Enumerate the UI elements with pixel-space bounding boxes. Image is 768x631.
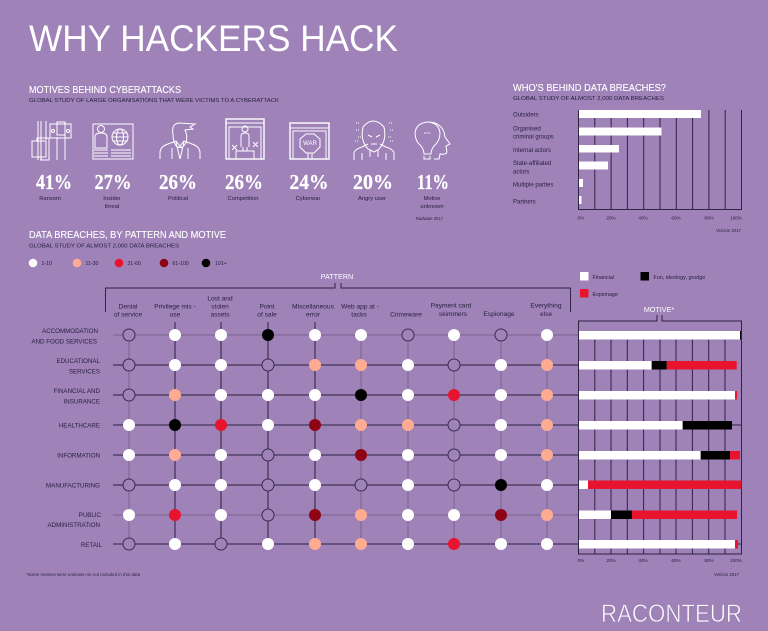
stacked bars: motive xyxy=(579,331,742,548)
column headers: Point xyxy=(259,304,275,310)
matrix: row retail xyxy=(123,538,553,550)
row labels: RETAIL xyxy=(81,542,103,549)
icon: ransom xyxy=(32,121,71,160)
stat: insider threat: Insider xyxy=(103,196,121,202)
column headers: Everything xyxy=(530,302,562,310)
row labels: Outsiders xyxy=(513,112,539,118)
axis labels: 100% xyxy=(730,216,742,220)
subheading: who's behind: GLOBAL STUDY OF ALMOST 2,000 DATA BREACHES xyxy=(513,96,664,102)
heading: who's behind: WHO'S BEHIND DATA BREACHES? xyxy=(513,83,666,94)
row labels: actors xyxy=(513,170,529,176)
row labels: criminal groups xyxy=(513,134,554,140)
column headers xyxy=(114,296,562,318)
legend: motive colours: Espionage xyxy=(592,292,618,298)
column headers: else xyxy=(540,311,552,318)
bar chart: who's behind xyxy=(579,110,701,204)
column headers: Denial xyxy=(119,304,138,310)
legend: motive colours: Financial xyxy=(592,275,614,281)
gridlines xyxy=(578,110,742,210)
source: verizon: Verizon 2017 xyxy=(716,228,742,233)
row labels: HEALTHCARE xyxy=(59,422,100,430)
panel: data breaches by pattern and motive xyxy=(26,230,742,577)
title: WHY HACKERS HACK xyxy=(29,17,398,59)
axis labels: 0% xyxy=(578,216,584,220)
column headers: stolen xyxy=(211,304,229,310)
stat: insider threat: threat xyxy=(105,204,120,210)
stat: political: 26% xyxy=(159,170,197,194)
matrix: row financial xyxy=(123,389,553,401)
stat: insider threat xyxy=(94,170,132,210)
legend: dot sizes xyxy=(29,259,227,267)
motive axis labels xyxy=(578,558,742,563)
row labels: INFORMATION xyxy=(57,452,100,460)
column headers: Payment card xyxy=(431,302,472,310)
column headers: Privilege mis - xyxy=(154,304,196,310)
icon: competition xyxy=(226,119,264,159)
motive axis labels: 100% xyxy=(730,558,742,563)
row labels: ACCOMMODATION xyxy=(42,328,98,335)
stat: competition xyxy=(225,170,263,202)
source: radware: Radware 2017 xyxy=(416,216,444,221)
column headers: of sale xyxy=(257,312,277,318)
pattern label and bracket xyxy=(106,272,570,312)
column headers: Miscellaneous xyxy=(292,304,335,310)
footnote: *Some motives were unknown so not included in this data xyxy=(26,572,141,577)
row labels xyxy=(31,328,103,549)
legend: motive colours xyxy=(580,272,705,298)
axis labels: 60% xyxy=(671,216,681,220)
stat: motive unknown: unknown xyxy=(420,204,444,210)
icon: motive unknown xyxy=(415,122,450,159)
axis labels: 80% xyxy=(704,216,714,220)
column headers: tacks xyxy=(351,312,367,318)
row labels: PUBLIC xyxy=(79,512,102,519)
matrix: row healthcare xyxy=(123,419,553,431)
axis labels: 40% xyxy=(638,216,648,220)
legend: dot sizes: 61-100 xyxy=(172,261,189,267)
stat: ransom xyxy=(36,170,72,202)
legend: motive colours: Fun, ideology, grudge xyxy=(654,275,705,281)
row labels: FINANCIAL AND xyxy=(53,388,101,395)
legend: dot sizes: 11-30 xyxy=(86,261,98,267)
row labels: ADMINISTRATION xyxy=(48,522,100,529)
row labels xyxy=(513,112,554,206)
column headers: Web app at - xyxy=(341,304,379,310)
motive axis labels: 80% xyxy=(704,558,714,563)
icon: political figure xyxy=(160,123,200,159)
logo: raconteur: RACONTEUR xyxy=(601,600,742,628)
icon: cyberwar: WAR xyxy=(303,141,318,147)
motive axis labels: 40% xyxy=(638,558,648,563)
motive label and bracket: MOTIVE* xyxy=(644,305,674,314)
row labels: INSURANCE xyxy=(64,398,100,406)
column headers: Crimeware xyxy=(390,312,422,318)
column headers: assets xyxy=(210,312,230,318)
motive axis labels: 60% xyxy=(671,558,681,563)
legend: dot sizes: 101+ xyxy=(215,261,227,267)
column headers: of service xyxy=(114,312,142,318)
panel: motives behind cyberattacks xyxy=(29,85,450,221)
row labels: Multiple parties xyxy=(513,182,553,188)
motive axis labels: 0% xyxy=(578,558,584,563)
stat: political xyxy=(159,170,197,202)
stat: ransom: 41% xyxy=(36,170,72,194)
stat: competition: 26% xyxy=(225,170,263,194)
stat: motive unknown: 11% xyxy=(417,170,449,194)
matrix: row public administration xyxy=(123,509,553,521)
row labels: Partners xyxy=(513,200,536,206)
matrix: row information xyxy=(123,449,553,461)
stat: angry user: 20% xyxy=(353,170,393,194)
row labels: State-affiliated xyxy=(513,161,551,167)
matrix: row accommodation xyxy=(123,329,553,341)
stat: political: Political xyxy=(168,196,188,202)
row labels: AND FOOD SERVICES xyxy=(31,338,97,346)
row labels: Organised xyxy=(513,126,541,132)
axis labels: 20% xyxy=(606,216,616,220)
matrix: row educational xyxy=(123,359,553,371)
stat: motive unknown: Motive xyxy=(423,196,441,202)
legend: dot sizes: 1-10 xyxy=(42,261,52,267)
column headers: skimmers xyxy=(439,311,468,318)
heading: data breaches: DATA BREACHES, BY PATTERN AND MOTIVE xyxy=(29,230,226,241)
source: verizon: Verizon 2017 xyxy=(714,572,740,577)
motive axis labels: 20% xyxy=(606,558,616,563)
stat: insider threat: 27% xyxy=(94,170,132,194)
stat: cyberwar: 24% xyxy=(290,170,328,194)
subheading: motives: GLOBAL STUDY OF LARGE ORGANISATIONS THAT WERE VICTIMS TO A CYBERATTACK xyxy=(29,98,279,104)
column headers: error xyxy=(306,312,321,318)
subheading: data breaches: GLOBAL STUDY OF ALMOST 2,000 DATA BREACHES xyxy=(29,244,179,250)
column headers: Lost and xyxy=(207,296,233,302)
axis labels xyxy=(578,216,742,220)
stat: cyberwar: Cyberwar xyxy=(296,196,320,202)
stat: competition: Competition xyxy=(228,196,258,202)
stat: motive unknown xyxy=(417,170,449,210)
stat: angry user: Angry user xyxy=(358,196,386,202)
icon: cyberwar xyxy=(290,123,329,159)
column headers: use xyxy=(170,312,181,318)
row labels: MANUFACTURING xyxy=(46,482,100,490)
stat: ransom: Ransom xyxy=(39,196,61,202)
motive label and bracket xyxy=(578,305,742,554)
icon: insider threat xyxy=(93,124,133,159)
heading: motives: MOTIVES BEHIND CYBERATTACKS xyxy=(29,85,181,96)
column headers: Espionage xyxy=(483,311,515,318)
row labels: Internal actors xyxy=(513,148,551,154)
motive gridlines xyxy=(595,339,725,554)
legend: dot sizes: 31-60 xyxy=(128,261,141,267)
row labels: SERVICES xyxy=(69,368,100,376)
row labels: EDUCATIONAL xyxy=(56,358,101,365)
matrix: row manufacturing xyxy=(123,479,553,491)
icon: angry user xyxy=(354,121,394,160)
matrix grid lines xyxy=(113,322,741,544)
panel: who's behind data breaches xyxy=(513,83,742,233)
pattern label and bracket: PATTERN xyxy=(321,272,353,281)
